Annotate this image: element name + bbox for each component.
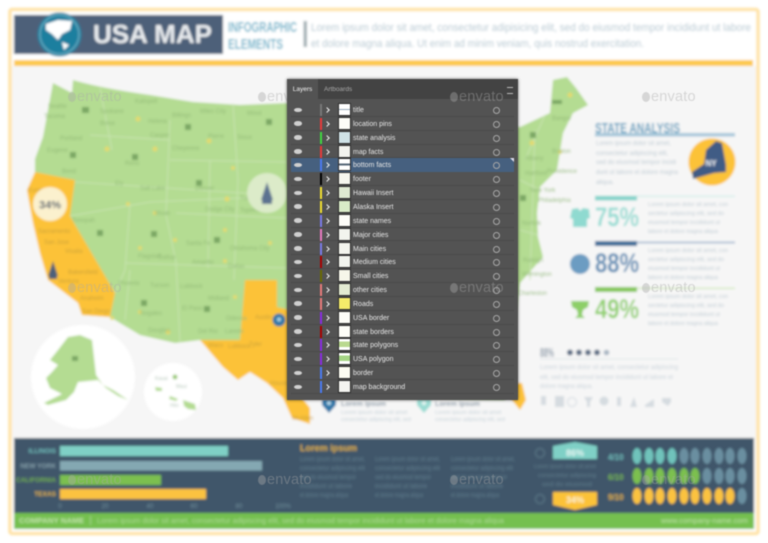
city dots: main (104, 92, 572, 334)
envato watermark 6: envato (77, 472, 122, 488)
city names: Spokane (100, 109, 124, 115)
city names: Denver (195, 186, 214, 192)
city names: Dallas (228, 264, 245, 270)
bottom text columns: incididunt ut labore (300, 484, 353, 490)
envato watermark 7: envato (267, 472, 312, 488)
city names: Bend (62, 169, 76, 175)
state analysis body: Lorem ipsum dolor sit amet, (596, 141, 671, 147)
city names: Billings (172, 113, 191, 119)
map background (12, 66, 756, 439)
stat: 75%: 75% (595, 202, 639, 232)
bottom location notes: Lorem ipsum dolor sit amet (341, 410, 408, 416)
stat: 88%: eiusmod tempor incididunt ut (648, 266, 720, 272)
city names: Norfolk (522, 221, 542, 227)
pictogram rows (608, 448, 746, 504)
bottom text columns: Lorem ipsum dolor sit amet, (300, 457, 365, 463)
envato watermark 9: envato (651, 472, 696, 488)
bottom text columns (300, 443, 515, 499)
rating block: dolore magna aliqua. (540, 384, 593, 390)
horizontal bar chart: 0 (58, 504, 62, 510)
city dots: major (70, 100, 562, 312)
city names: Gallup (158, 255, 176, 261)
stat: 49%: labore et dolore magna aliqua (648, 321, 719, 327)
stat: 75%: Lorem ipsum dolor sit amet, con (648, 202, 728, 208)
stat: 49%: 49% (595, 294, 639, 324)
layer: Alaska Insert: Alaska Insert (353, 204, 393, 211)
icon: New York state badge (688, 138, 736, 186)
layer: Hawaii Insert: Hawaii Insert (353, 190, 393, 197)
rating dots (567, 350, 609, 356)
stat: 49%: eiusmod tempor incididunt ut (648, 312, 720, 318)
bottom location notes: consectetur adipiscing elit, sed (341, 417, 411, 423)
layer: Small cities: Small cities (353, 273, 388, 280)
city names: Amarillo (192, 260, 214, 266)
layer: Alaska Insert (291, 200, 514, 214)
bottom text columns: incididunt ut labore (451, 484, 504, 490)
bottom text columns: consectetur adipiscing elit (451, 466, 513, 472)
stat: 75% (570, 196, 735, 235)
envato watermark 8: envato (459, 472, 504, 488)
city names: Phoenix (118, 281, 140, 287)
layer: location pins (291, 117, 514, 131)
bottom location notes: Lorem ipsum dolor sit amet (435, 410, 502, 416)
state names on yellow states: McAllen (292, 416, 313, 422)
footer strip: Lorem ipsum dolor sit amet, consectetur adipiscing elit, sed do eiusmod tempor incididunt ut labore et dolore magna aliqua (97, 516, 505, 525)
city names: Ely (115, 181, 123, 187)
subtitle (228, 20, 297, 53)
layer: border (291, 366, 514, 380)
subtitle: INFOGRAPHIC (228, 20, 297, 36)
rating block: Lorem ipsum dolor sit amet, consectetur adipiscing (540, 365, 678, 371)
stat: 88%: Lorem ipsum dolor sit amet, con (648, 248, 728, 254)
envato watermark over panel middle: envato (459, 280, 504, 296)
layer: border: border (353, 370, 373, 377)
city names: Kalispell (135, 99, 157, 105)
layer: state polygons: state polygons (353, 342, 398, 349)
layer: Main cities (291, 242, 514, 255)
city names: Laredo (225, 329, 244, 335)
city names: Seattle (48, 104, 67, 110)
bottom text columns: Lorem ipsum dolor sit amet, (451, 457, 515, 463)
pictogram rows: 4/10 (608, 453, 624, 462)
city names: Nogales (140, 311, 162, 317)
percent callouts: sed do eiusmod (542, 482, 592, 488)
layer: bottom facts: bottom facts (353, 162, 391, 169)
layer: Hawaii Insert (291, 186, 514, 200)
layer: title (291, 103, 514, 117)
bottom text columns: sed do eiusmod tempor (451, 475, 507, 481)
city names: Albany (525, 156, 543, 162)
stat: 88%: sectetur adipiscing elit, sed do (648, 257, 724, 263)
city names: Tonopah (72, 218, 95, 224)
city names: Tulsa (240, 196, 255, 202)
horizontal bar chart: 40 (147, 504, 154, 510)
layer: Medium cities (291, 255, 514, 269)
stat: 75%: eiusmod tempor incididunt ut (648, 220, 720, 226)
stat: 88% (570, 241, 735, 281)
horizontal bar chart: CALIFORNIA (16, 477, 56, 484)
bottom text columns: consectetur adipiscing elit (300, 466, 365, 472)
Hawaii inset: Hilo (170, 403, 179, 409)
bottom dark band (14, 438, 754, 514)
city names: Raleigh (523, 258, 543, 264)
layer: USA polygon: USA polygon (353, 356, 393, 363)
city names: Douglas (148, 328, 170, 334)
bottom text columns: et dolore magna aliqua (451, 493, 500, 499)
highlighted pin circle (247, 173, 287, 213)
footer strip (14, 513, 754, 529)
rating block: elit, sed do eiusmod tempor incididunt ut labore et (540, 375, 673, 381)
city names: Del Rio (198, 329, 218, 335)
city names: Pierre (208, 134, 225, 140)
pictogram rows: 9/10 (608, 493, 624, 502)
state names on yellow states: Waco (208, 343, 224, 349)
Hawaii inset (144, 363, 202, 421)
city names: Miles City (200, 109, 226, 115)
city names: Sioux (237, 135, 252, 141)
state analysis body: dunt ut labore et dolore magna (596, 170, 679, 176)
layer: map facts: map facts (353, 149, 383, 156)
bottom location notes: Lorem ipsum (435, 401, 480, 408)
layer: Medium cities: Medium cities (353, 259, 396, 266)
horizontal bar chart (16, 446, 291, 510)
state names on yellow states: Eureka (28, 188, 48, 194)
state names on yellow states: Anaheim (80, 296, 104, 302)
intro text (311, 22, 751, 50)
subtitle: ELEMENTS (228, 37, 283, 53)
state analysis body: aliqua. (596, 180, 614, 186)
percent callouts: consectetur adipiscing (538, 473, 596, 479)
city names: New York (530, 188, 556, 194)
layer: other cities (291, 283, 514, 297)
stat: 88%: labore et dolore magna aliqua (648, 275, 719, 281)
city names: Santa Fe (186, 241, 211, 247)
city names: Reno (125, 161, 140, 167)
panel tab bar: Artboards (324, 86, 352, 93)
header divider (304, 21, 307, 47)
bottom location notes: consectetur adipiscing elit, sed (435, 417, 505, 423)
layer: Roads (291, 297, 514, 311)
state names on yellow states: Tyler (249, 342, 262, 348)
city names: Minot (247, 111, 262, 117)
percent callouts: 34% (566, 495, 584, 505)
percent callouts (534, 442, 597, 510)
stat: 49%: Lorem ipsum dolor sit amet, con (648, 294, 728, 300)
city names: Casper (150, 133, 169, 139)
percent callouts: 86% (566, 448, 584, 458)
city names: Eugene (47, 148, 68, 154)
layer: other cities: other cities (353, 287, 387, 294)
layer: location pins: location pins (353, 121, 392, 128)
stat: 49% (571, 287, 735, 327)
state names on yellow states: Houston (270, 381, 292, 387)
layer: Major cities (291, 228, 514, 241)
panel tab bar (287, 79, 518, 99)
state names on yellow states: Visalia (65, 249, 83, 255)
pictogram rows: 6/10 (608, 473, 624, 482)
bottom location notes (322, 399, 505, 423)
state names on yellow states: San Diego (82, 309, 111, 315)
state names on yellow states: Ventura (58, 279, 79, 285)
layer: map facts (291, 145, 514, 158)
icon: New York state badge: NY (705, 159, 717, 168)
Florida highlighted (505, 383, 526, 410)
city names: Philadelphia (538, 198, 571, 204)
Hawaii inset: Maui (176, 384, 187, 390)
layer: map background (291, 380, 514, 394)
city names: Helena (148, 119, 168, 125)
city names: Boston (552, 149, 571, 155)
layer: title: title (353, 107, 364, 114)
percent callouts: Lorem ipsum dolor sit amet (534, 464, 596, 470)
horizontal bar chart: 100% (275, 504, 291, 510)
state label badge 34%: 34% (39, 200, 61, 212)
title banner: USA MAP (93, 21, 212, 49)
state names on yellow states: Austin (255, 315, 272, 321)
city names: Tucson (150, 283, 169, 289)
city names: Flagstaff (138, 254, 161, 260)
location pin on California (48, 261, 58, 279)
USA polygon (35, 77, 588, 400)
city names: Odessa (226, 316, 247, 322)
envato watermark over panel top: envato (459, 89, 504, 105)
bottom text columns: consectetur adipiscing elit (375, 466, 440, 472)
layer: Major cities: Major cities (353, 232, 388, 239)
city names (44, 99, 578, 335)
bottom text columns: sed do eiusmod tempor (375, 475, 431, 481)
bottom text columns: Lorem ipsum dolor sit amet, (375, 457, 440, 463)
Hawaii inset: Kauai (155, 376, 168, 382)
horizontal bar chart: 60 (191, 504, 198, 510)
layer: Roads: Roads (353, 301, 373, 308)
panel tab bar: Layers (293, 86, 312, 93)
rating block (540, 345, 678, 407)
city names: Boise (100, 121, 116, 127)
city names: Lubbock (180, 284, 204, 290)
layer: USA border (291, 311, 514, 325)
stat: 75%: sectetur adipiscing elit, sed do (648, 211, 724, 217)
layer: bottom facts (291, 158, 514, 172)
state names on yellow states: Lubbock (228, 344, 252, 350)
city names: El Paso (182, 306, 203, 312)
city names: Bangor (552, 116, 571, 122)
layer: Main cities: Main cities (353, 246, 386, 252)
envato watermark 3: envato (651, 89, 696, 105)
USA map (27, 77, 588, 424)
layer: map background: map background (353, 384, 405, 391)
blue location pin (272, 314, 286, 326)
bottom text columns: sed do eiusmod tempor (300, 475, 356, 481)
icon row (541, 396, 671, 407)
bottom location notes: Lorem ipsum (341, 401, 386, 408)
intro text: et dolore magna aliqua. Ut enim ad minim veniam, quis nostrud exercitation. (311, 38, 644, 50)
layer: USA polygon (291, 352, 514, 366)
footer strip: COMPANY NAME (19, 516, 84, 525)
city names: Topeka (240, 208, 260, 214)
envato watermark 5: envato (651, 280, 696, 296)
layer: state analysis (291, 131, 514, 145)
yellow header rule (14, 60, 753, 66)
footer strip: www.company-name.com (660, 516, 748, 525)
layer: state names (291, 214, 514, 228)
envato watermark 4: envato (77, 280, 122, 296)
city names: Dodge City (205, 207, 235, 213)
layer: state borders (291, 325, 514, 338)
city names: Midland (208, 296, 229, 302)
layer: USA border: USA border (353, 315, 389, 322)
layer: state polygons (291, 338, 514, 352)
city names: Moab (155, 211, 171, 217)
heading: STATE ANALYSIS (595, 120, 680, 137)
city names: Tacoma (44, 114, 66, 120)
envato watermark 1: envato (77, 89, 122, 105)
state analysis body (596, 141, 679, 186)
state label badge 34% (33, 187, 67, 221)
layer: state names: state names (353, 218, 391, 225)
city names: Charleston (518, 291, 547, 297)
panel: state analysis (570, 120, 736, 327)
layer: Small cities (291, 269, 514, 283)
horizontal bar chart: 20 (102, 504, 109, 510)
envato watermark 2: envato (267, 89, 312, 105)
state borders (70, 88, 545, 342)
state names on yellow states: Sacramento (38, 229, 71, 235)
state analysis body: sed do eiusmod tempor incidi (596, 160, 676, 166)
city names: Salt Lake (140, 186, 166, 192)
horizontal bar chart: NEW YORK (20, 463, 56, 470)
horizontal bar chart: TEXAS (34, 491, 57, 498)
horizontal bar chart: ILLINOIS (29, 448, 57, 455)
rating block: 88% (540, 345, 554, 360)
layer: footer (291, 172, 514, 186)
city names: Providence (547, 169, 578, 175)
horizontal bar chart: 80 (236, 504, 243, 510)
California highlighted (27, 172, 115, 317)
city names: Oklahoma City (230, 246, 269, 252)
Alaska inset (31, 325, 135, 429)
state names on yellow states: San Jose (44, 240, 70, 246)
panel: layers (287, 79, 518, 400)
city names: Portland (60, 136, 82, 142)
stat: 88%: 88% (595, 248, 639, 278)
bottom text columns: et dolore magna aliqua (375, 493, 424, 499)
Texas highlighted (200, 280, 310, 424)
bottom text columns: Lorem ipsum (300, 443, 357, 454)
layer: footer: footer (353, 176, 371, 183)
city names: Hartford (525, 171, 547, 177)
city names: Cheyenne (172, 146, 200, 152)
title banner (14, 12, 223, 56)
state analysis body: consectetur adipiscing elit, (596, 151, 668, 157)
state names on yellow states (28, 188, 313, 422)
bottom text columns: et dolore magna aliqua (300, 493, 349, 499)
stat: 75%: labore et dolore magna aliqua (648, 229, 719, 235)
bottom text columns: incididunt ut labore (375, 484, 428, 490)
city names: Wilmington (522, 272, 552, 278)
layer: state analysis: state analysis (353, 135, 395, 142)
layer: state borders: state borders (353, 329, 394, 336)
state names on yellow states: Bakersfield (68, 270, 98, 276)
stat: 49%: sectetur adipiscing elit, sed do (648, 303, 724, 309)
